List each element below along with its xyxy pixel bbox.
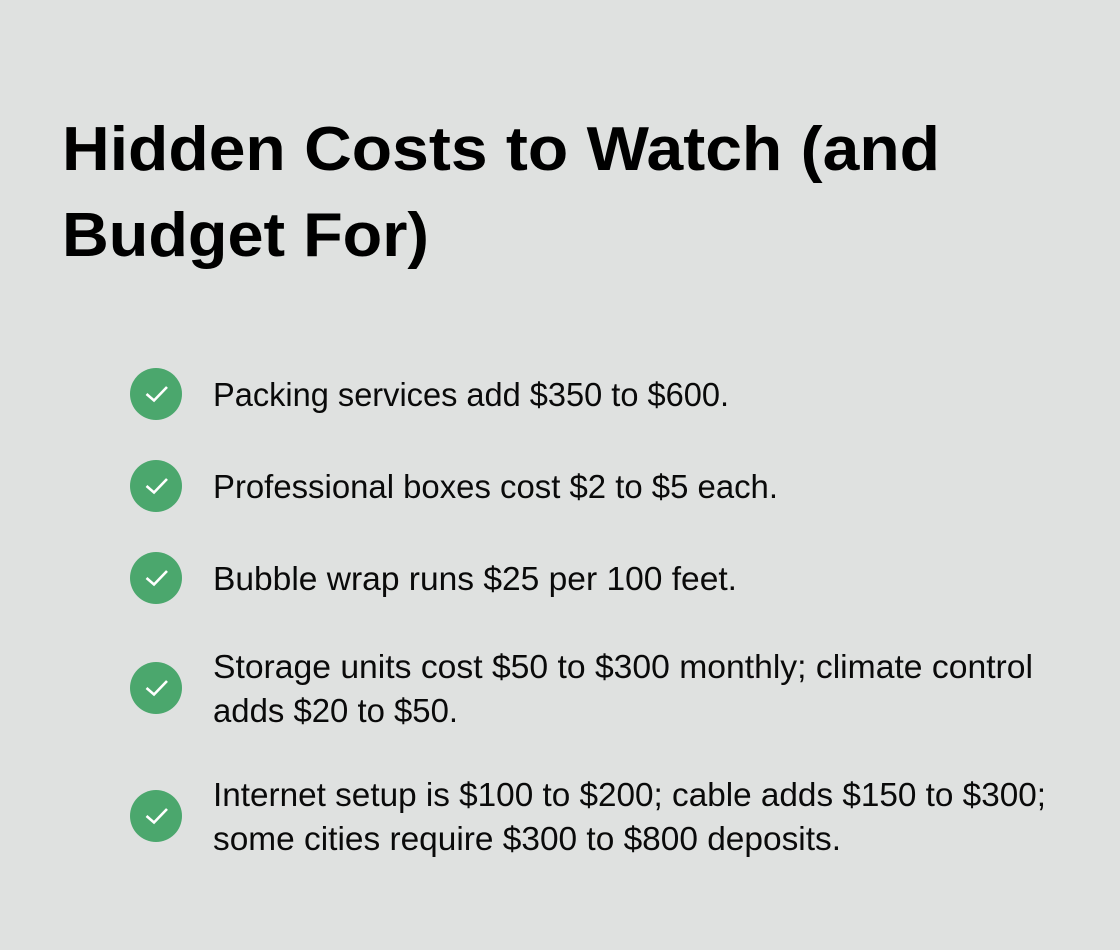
- checklist: [130, 368, 1046, 857]
- item: professional boxes: Professional boxes cost $2 to $5 each.: [213, 468, 778, 505]
- item: internet setup: some cities require $300 to $800 deposits.: [213, 820, 841, 857]
- item: storage units: [130, 648, 1033, 729]
- title: Hidden Costs to Watch (and: [62, 115, 940, 184]
- item: bubble wrap: [130, 552, 737, 604]
- item: professional boxes: [130, 460, 778, 512]
- title: [62, 115, 940, 270]
- item: packing services: Packing services add $350 to $600.: [213, 376, 729, 413]
- item: storage units: adds $20 to $50.: [213, 692, 458, 729]
- item: bubble wrap: Bubble wrap runs $25 per 100 feet.: [213, 560, 737, 597]
- item: internet setup: Internet setup is $100 to $200; cable adds $150 to $300;: [213, 776, 1046, 813]
- item: packing services: [130, 368, 729, 420]
- item: internet setup: [130, 776, 1046, 857]
- title: Budget For): [62, 201, 429, 270]
- item: storage units: Storage units cost $50 to $300 monthly; climate control: [213, 648, 1033, 685]
